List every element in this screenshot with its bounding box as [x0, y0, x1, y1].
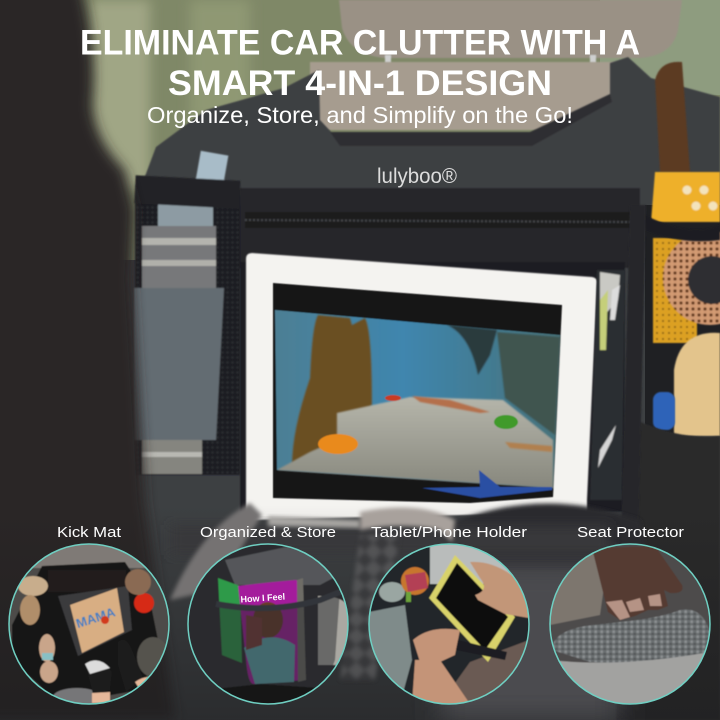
photo: organized and store: How I Feel	[240, 591, 285, 605]
blue toy	[653, 392, 675, 430]
vinyl window edge	[590, 270, 625, 500]
yellow toy	[651, 172, 720, 222]
brown strap	[655, 62, 690, 172]
ring: kick mat	[9, 544, 169, 704]
mesh pocket toys	[653, 231, 720, 343]
title	[80, 24, 640, 103]
label: organized and store: Organized & Store	[200, 524, 336, 541]
photo: tablet phone holder	[369, 544, 530, 704]
feature: seat protector	[550, 524, 712, 704]
photo: seat protector	[550, 544, 712, 704]
feature: kick mat	[9, 524, 169, 706]
logo: lulyboo®	[377, 165, 458, 188]
foreground blurred shoes and seat	[170, 503, 650, 720]
photo: kick mat: MAMA	[74, 604, 118, 631]
lower pocket	[628, 420, 720, 720]
photo: kick mat	[9, 544, 169, 706]
ring: seat protector	[550, 544, 710, 704]
feature: organized and store	[188, 524, 350, 704]
right pocket with toys	[616, 62, 720, 720]
subtitle: Organize, Store, and Simplify on the Go!	[147, 102, 573, 128]
blurred person in foreground	[0, 0, 175, 720]
tablet screen	[273, 283, 562, 503]
left mesh pocket with bottle	[134, 151, 241, 475]
feature: tablet phone holder	[369, 524, 530, 704]
label: tablet phone holder: Tablet/Phone Holder	[371, 524, 527, 541]
title: SMART 4-IN-1 DESIGN	[168, 64, 552, 103]
bottom dark veil	[0, 505, 720, 720]
headrest	[339, 0, 682, 75]
ring: tablet phone holder	[369, 544, 529, 704]
label: kick mat: Kick Mat	[57, 524, 122, 541]
tablet	[246, 253, 597, 520]
wooden toy	[674, 333, 720, 436]
title: ELIMINATE CAR CLUTTER WITH A	[80, 24, 640, 62]
ring: organized and store	[188, 544, 348, 704]
seat back panel	[310, 62, 625, 130]
photo: organized and store	[188, 544, 350, 704]
label: seat protector: Seat Protector	[577, 524, 684, 541]
organizer body	[138, 57, 720, 720]
seam band	[616, 205, 646, 720]
